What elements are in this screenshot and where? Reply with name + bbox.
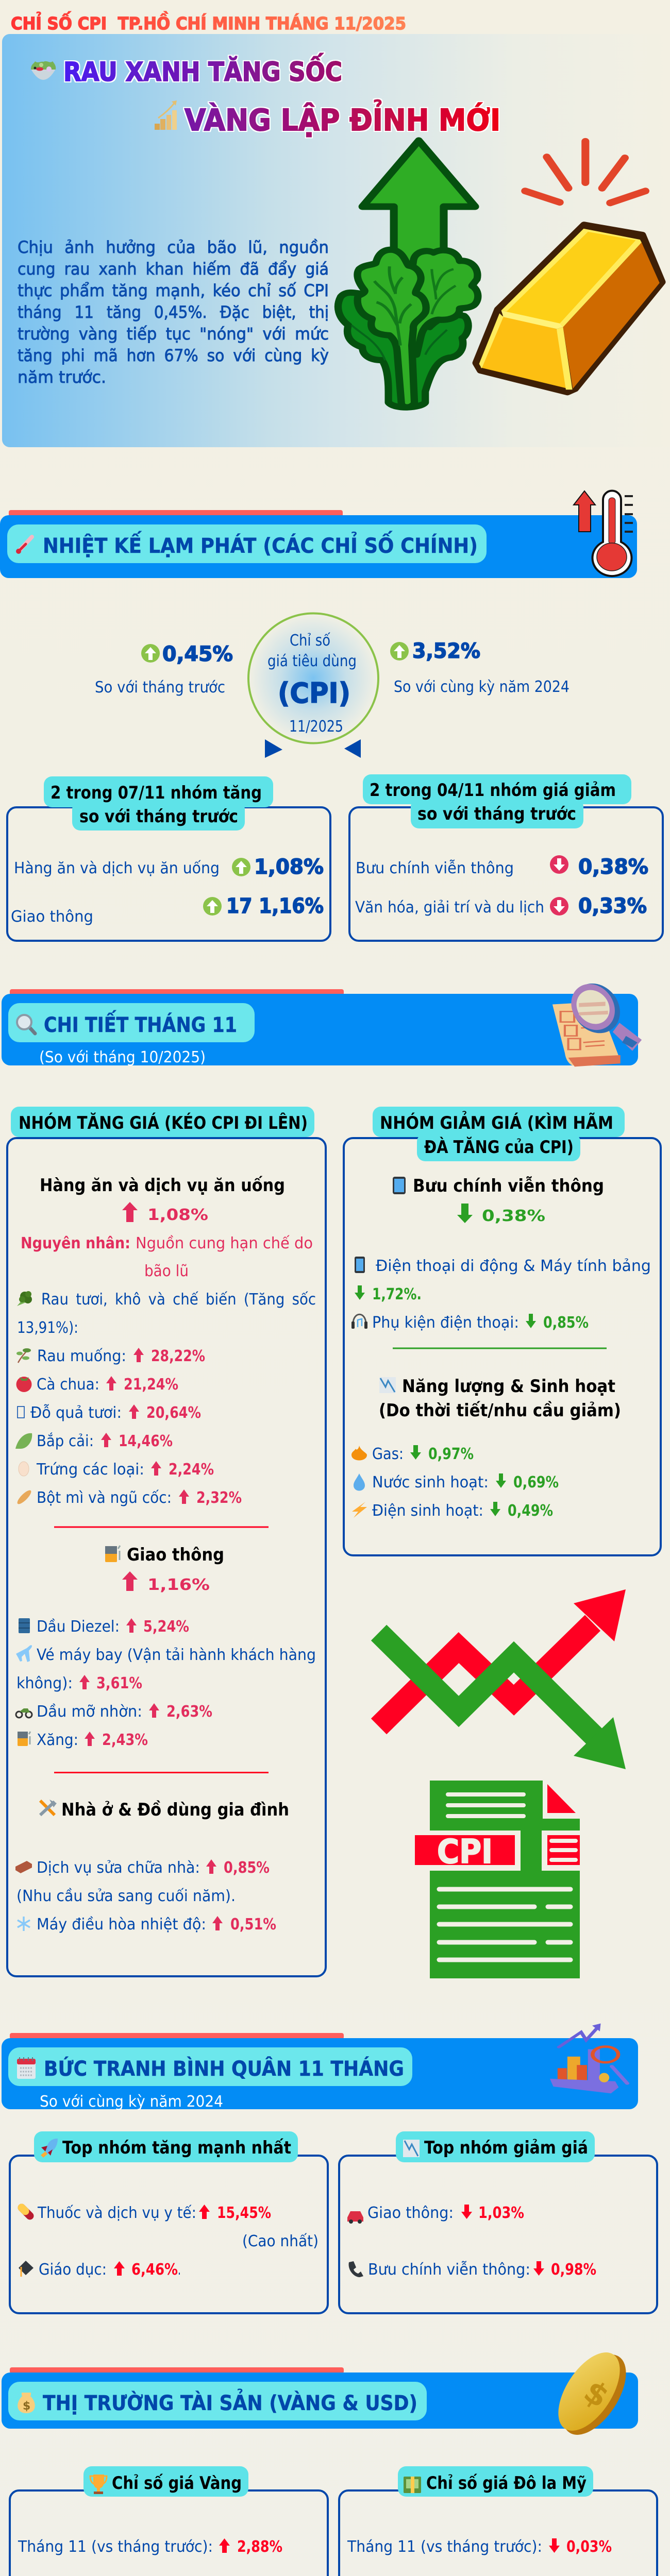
icon: brick [15, 1861, 32, 1873]
row: phones and tablets: 1,72%. [372, 1285, 422, 1303]
panel: hero [2, 34, 670, 447]
stat: year over year: 3,52% [412, 639, 480, 663]
heading line two: so với tháng trước [79, 806, 238, 827]
text: fresh vegetables [17, 1291, 316, 1337]
heading: four groups falling: 2 trong 04/11 nhóm giá giảm [370, 780, 616, 801]
row: culture and tourism [355, 894, 647, 918]
panel: US dollar index [339, 2466, 657, 2576]
heading: nhom giam gia: NHÓM GIẢM GIÁ (KÌM HÃM [380, 1111, 613, 1133]
icon: broccoli [17, 1291, 32, 1306]
heading: vang lap dinh moi: VÀNG LẬP ĐỈNH MỚI [185, 99, 500, 138]
circle: CPI badge: (CPI) [278, 677, 350, 709]
icon: lettuce [15, 1433, 32, 1449]
row: electricity: Điện sinh hoạt: [372, 1502, 483, 1520]
row: petrol [37, 1731, 148, 1749]
subheading: (So với tháng 10/2025) [39, 1048, 206, 1066]
text: fresh vegetables: Rau tươi, khô và chế biến (Tăng sốc [41, 1291, 316, 1309]
row: transport [11, 894, 324, 926]
row: gas: 0,97% [428, 1445, 474, 1463]
panel: groups falling [349, 774, 663, 941]
row: cabbage: 14,46% [119, 1432, 173, 1450]
panel: price increases [7, 1107, 326, 1976]
icon: pill [22, 2208, 30, 2216]
icon: rocket [41, 2139, 58, 2158]
row: diesel: 5,24% [143, 1618, 189, 1636]
row: air tickets [16, 1646, 316, 1692]
subheading: energy: Năng lượng & Sinh hoạt [402, 1376, 615, 1397]
row: medicine [37, 2204, 319, 2250]
panel: top rising groups [10, 2131, 328, 2313]
heading: top rising: Top nhóm tăng mạnh nhất [62, 2138, 291, 2158]
text block: hero paragraph: thực phẩm tăng mạnh, kéo chỉ số CPI [18, 281, 329, 300]
row: cabbage [37, 1432, 173, 1450]
text: fresh vegetables: 13,91%): [17, 1319, 78, 1337]
icon: small thermometer [16, 537, 32, 554]
panel: gold index [10, 2466, 328, 2576]
row: electricity [372, 1502, 553, 1520]
icon: snowflake [18, 1917, 30, 1931]
icon: airplane [16, 1645, 32, 1662]
text block: hero paragraph: cung rau xanh khan hiếm đã đẩy giá [18, 259, 329, 279]
icon: mobile phone large [393, 1177, 406, 1194]
row: morning glory: 28,22% [151, 1347, 205, 1365]
text block: hero paragraph: trường vàng tiếp tục "nóng" với mức [18, 324, 329, 344]
row: medicine: (Cao nhất) [242, 2232, 319, 2250]
subheading: transport: Giao thông [127, 1545, 224, 1565]
text: repair note: (Nhu cầu sửa sang cuối năm). [16, 1887, 236, 1905]
stat: telecom 0.38 [457, 1204, 545, 1225]
text block: hero paragraph: tháng 11 tăng 0,45%. Đặc biệt, thị [18, 302, 329, 322]
icon: tools [40, 1800, 57, 1815]
row: education: . [178, 2261, 181, 2279]
row: phone accessories: 0,85% [543, 1314, 589, 1332]
icon: magnifier [17, 1015, 35, 1033]
circle: CPI badge: Chỉ số [290, 632, 331, 650]
panel: section header November details [2, 981, 642, 1066]
stat: month over month [95, 642, 233, 697]
text: cause: bão lũ [144, 1262, 189, 1280]
circle: CPI badge: 11/2025 [289, 718, 343, 736]
row: water [372, 1473, 559, 1492]
icon: oil barrel [19, 1618, 30, 1633]
row: medicine: Thuốc và dịch vụ y tế: [37, 2204, 196, 2222]
row: petrol: Xăng: [37, 1731, 78, 1749]
icon: petrol pump [18, 1732, 30, 1746]
row: cabbage: Bắp cải: [37, 1432, 94, 1450]
row: education: 6,46% [131, 2261, 178, 2279]
icon: lightning bolt [352, 1502, 367, 1518]
row: morning glory [37, 1347, 205, 1365]
icon: headphones [351, 1314, 367, 1329]
illustration: thermometer with up arrow [574, 491, 633, 576]
icon: salad bowl [31, 61, 56, 80]
row: food [14, 855, 324, 879]
row: education [39, 2261, 181, 2279]
row: tomato: 21,24% [124, 1376, 178, 1394]
row: electricity: 0,49% [508, 1502, 553, 1520]
row: dollar month: Tháng 11 (vs tháng trước): [347, 2538, 542, 2556]
panel: groups rising [7, 776, 330, 941]
illustration: document and magnifier [552, 981, 642, 1066]
row: post and telecom: Bưu chính viễn thông: [368, 2261, 530, 2279]
heading: dollar index: Chỉ số giá Đô la Mỹ [426, 2473, 587, 2494]
panel: top falling groups [339, 2131, 657, 2313]
stat: month over month: So với tháng trước [95, 679, 225, 697]
illustration: gold coin: $ [577, 2374, 615, 2415]
panel: section header eleven month average [2, 2024, 638, 2111]
row: tomato [37, 1376, 178, 1394]
chart: crossing red and green trend arrows [379, 1589, 626, 1769]
row: tomato: Cà chua: [37, 1376, 99, 1394]
text: cause [21, 1234, 313, 1280]
subheading: energy note: (Do thời tiết/nhu cầu giảm) [379, 1400, 621, 1421]
stat: food 1.08 [122, 1202, 208, 1224]
icon: egg [19, 1462, 29, 1476]
icon: trophy [90, 2475, 107, 2494]
stat: transport 1.16: 1,16% [147, 1576, 210, 1594]
row: gold month: Tháng 11 (vs tháng trước): [18, 2538, 213, 2556]
row: water: 0,69% [513, 1473, 559, 1492]
icon: telephone receiver [349, 2261, 363, 2277]
icon: car [347, 2211, 363, 2224]
text block: hero paragraph: năm trước. [18, 367, 106, 387]
illustration: green arrow with leafy greens [338, 141, 478, 408]
subheading: telecom: Bưu chính viễn thông [413, 1176, 604, 1196]
row: home repair: Dịch vụ sửa chữa nhà: [37, 1859, 200, 1877]
row: lubricants: 2,63% [166, 1703, 212, 1721]
stat: month over month: 0,45% [162, 642, 233, 666]
icon: rising gold chart [155, 100, 177, 130]
row: flour and grains: Bột mì và ngũ cốc: [37, 1489, 172, 1507]
icon: graduation cap [19, 2261, 34, 2277]
row: transport: Giao thông [11, 908, 93, 926]
icon: fuel pump [105, 1546, 120, 1562]
row: post and telecom [356, 855, 648, 879]
circle: CPI badge [248, 613, 378, 743]
text: cause: Nguyên nhân: [21, 1234, 130, 1252]
row: gas [372, 1445, 474, 1463]
text block: hero paragraph: Chịu ảnh hưởng của bão lũ, nguồn [18, 238, 329, 257]
heading line two: ĐÀ TĂNG của CPI) [424, 1137, 574, 1158]
row: culture and tourism: 0,33% [578, 894, 647, 918]
row: transport [367, 2204, 524, 2222]
heading: rau xanh tang soc: RAU XANH TĂNG SỐC [63, 53, 342, 88]
row: eggs: Trứng các loại: [36, 1461, 144, 1479]
icon: banknotes [404, 2477, 421, 2493]
illustration: gold bar with rays [476, 141, 662, 392]
row: medicine: 15,45% [217, 2204, 271, 2222]
row: green beans: 20,64% [146, 1404, 201, 1422]
illustration: CPI document [415, 1781, 580, 1978]
row: gold month: 2,88% [237, 2538, 282, 2556]
text block: hero paragraph [18, 238, 329, 387]
row: post and telecom: 0,38% [578, 855, 648, 879]
row: flour and grains: 2,32% [196, 1489, 242, 1507]
row: gas: Gas: [372, 1445, 404, 1463]
panel: price decreases [344, 1107, 661, 1555]
illustration: CPI document: CPI [437, 1833, 493, 1871]
icon: fire [351, 1446, 367, 1460]
row: food: 1,08% [254, 855, 324, 879]
icon: herb [16, 1348, 31, 1363]
subheading: So với cùng kỳ năm 2024 [40, 2093, 223, 2111]
row: phones and tablets: Điện thoại di động & Máy tính bảng [376, 1257, 651, 1275]
row: green beans: Đỗ quả tươi: [30, 1404, 122, 1422]
arrow: right pointer [344, 739, 361, 758]
subheading: food: Hàng ăn và dịch vụ ăn uống [40, 1175, 285, 1196]
subheading: housing: Nhà ở & Đồ dùng gia đình [61, 1800, 289, 1820]
row: petrol: 2,43% [102, 1731, 148, 1749]
row: education: Giáo dục: [39, 2261, 107, 2279]
row: air tickets: Vé máy bay (Vận tải hành khách hàng [37, 1646, 316, 1664]
panel: section header inflation thermometer [0, 491, 637, 578]
circle: CPI badge: giá tiêu dùng [267, 652, 357, 670]
row: phones and tablets [355, 1257, 651, 1303]
row: transport: 1,03% [478, 2204, 524, 2222]
row: dollar month: 0,03% [566, 2538, 612, 2556]
stat: telecom 0.38: 0,38% [482, 1207, 545, 1225]
row: air tickets: không): [16, 1674, 73, 1692]
stat: food 1.08: 1,08% [147, 1206, 208, 1224]
icon: mobile phone small [355, 1257, 365, 1273]
heading line two: so với tháng trước [417, 804, 576, 824]
row: lubricants: Dầu mỡ nhờn: [37, 1703, 142, 1721]
row: culture and tourism: Văn hóa, giải trí và du lịch [355, 899, 544, 917]
icon: calendar [17, 2057, 36, 2079]
main title: CHỈ SỐ CPI TP.HỒ CHÍ MINH THÁNG 11/2025 [11, 10, 406, 33]
row: lubricants [37, 1703, 212, 1721]
row: phone accessories: Phụ kiện điện thoại: [372, 1314, 519, 1332]
chart: CPI headline [95, 613, 569, 758]
illustration: gold coin [546, 2342, 639, 2446]
icon: water drop [354, 1473, 365, 1491]
heading: seven groups rising: 2 trong 07/11 nhóm tăng [51, 783, 262, 803]
illustration: bar chart with magnifier [550, 2024, 627, 2093]
icon: falling chart [403, 2140, 420, 2157]
row: post and telecom: 0,98% [551, 2261, 596, 2279]
text: cause: Nguồn cung hạn chế do [136, 1234, 313, 1252]
row: water: Nước sinh hoạt: [372, 1473, 489, 1492]
heading: top falling: Top nhóm giảm giá [424, 2138, 588, 2158]
heading: thi truong tai san: THỊ TRƯỜNG TÀI SẢN (VÀNG & USD) [43, 2388, 417, 2415]
row: home repair: 0,85% [224, 1859, 270, 1877]
arrow: left pointer [265, 739, 282, 758]
row: air conditioners: 0,51% [230, 1916, 276, 1934]
row: eggs: 2,24% [169, 1461, 214, 1479]
heading: nhiet ke lam phat: NHIỆT KẾ LẠM PHÁT (CÁC CHỈ SỐ CHÍNH) [43, 530, 478, 558]
heading: chi tiet thang 11: CHI TIẾT THÁNG 11 [44, 1009, 237, 1037]
text block: hero paragraph: tăng phi mã hơn 67% so với cùng kỳ [18, 346, 329, 365]
row: diesel: Dầu Diezel: [37, 1618, 120, 1636]
row: transport: 17 1,16% [226, 894, 324, 918]
row: food: Hàng ăn và dịch vụ ăn uống [14, 859, 220, 877]
heading: gold index: Chỉ số giá Vàng [112, 2473, 242, 2494]
row: transport: Giao thông: [367, 2204, 454, 2222]
row: air conditioners: Máy điều hòa nhiệt độ: [37, 1916, 206, 1934]
icon: money bag: $ [23, 2400, 30, 2413]
row: morning glory: Rau muống: [37, 1347, 126, 1365]
icon: baguette [15, 1488, 33, 1506]
stat: year over year [390, 639, 569, 696]
icon: tomato [16, 1377, 32, 1392]
row: post and telecom: Bưu chính viễn thông [356, 859, 514, 877]
icon: falling chart [379, 1377, 396, 1393]
row: air tickets: 3,61% [96, 1674, 142, 1692]
stat: transport 1.16 [122, 1571, 210, 1594]
icon: motorbike [16, 1708, 32, 1718]
row: green beans [18, 1404, 201, 1422]
heading: nhom tang gia: NHÓM TĂNG GIÁ (KÉO CPI ĐI LÊN) [19, 1112, 308, 1133]
panel: section header assets [2, 2342, 639, 2446]
heading: buc tranh binh quan: BỨC TRANH BÌNH QUÂN 11 THÁNG [44, 2056, 404, 2081]
stat: year over year: So với cùng kỳ năm 2024 [394, 678, 569, 696]
icon: money bag [18, 2393, 35, 2413]
row: diesel [37, 1618, 189, 1636]
row: eggs [36, 1461, 214, 1479]
